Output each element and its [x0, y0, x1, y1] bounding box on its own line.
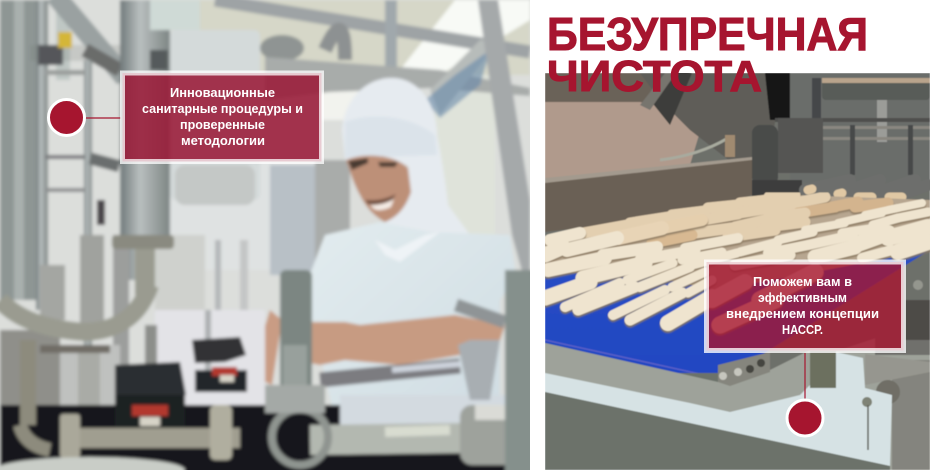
callout: HACCP implementation: внедрением концепции [726, 307, 879, 321]
dough bars: near rows [545, 203, 928, 325]
U-shaped sanitary pipes [0, 285, 150, 332]
hood [340, 78, 470, 240]
title: БЕЗУПРЕЧНАЯ [547, 8, 868, 60]
rollers [805, 180, 928, 195]
foreground steel pipes [280, 270, 312, 390]
callout: sanitary procedures: Инновационные [170, 86, 275, 100]
overhead pipes [215, 0, 530, 52]
upper machinery [545, 73, 652, 102]
forearm and hand [297, 315, 505, 365]
callout: HACCP implementation: Поможем вам в [753, 275, 852, 289]
callout: sanitary procedures [85, 73, 322, 162]
title [547, 8, 868, 101]
dough underlay [545, 194, 930, 290]
callout: sanitary procedures: санитарные процедуры и [142, 102, 303, 116]
face [346, 156, 411, 222]
marker: right callout dot [787, 400, 823, 436]
marker: left callout dot [48, 100, 84, 136]
background wall and window [200, 0, 530, 75]
black valves and lower machinery [155, 235, 205, 310]
title: ЧИСТОТА [547, 52, 762, 101]
white coat [310, 223, 514, 406]
blue belt [545, 252, 926, 374]
callout: sanitary procedures: проверенные [180, 118, 265, 132]
callout: HACCP implementation [706, 262, 904, 400]
dough bars: far rows [583, 195, 888, 243]
callout: sanitary procedures: методологии [181, 134, 265, 148]
photo: conveyor belt with dough bars [545, 70, 930, 470]
callout: HACCP implementation: НАССР. [782, 323, 823, 337]
callout: HACCP implementation: эффективным [758, 291, 847, 305]
chute [545, 158, 752, 232]
frame below belt [679, 372, 719, 382]
left pipes and frame [0, 0, 36, 300]
photo: worker at the pipework [0, 0, 535, 470]
